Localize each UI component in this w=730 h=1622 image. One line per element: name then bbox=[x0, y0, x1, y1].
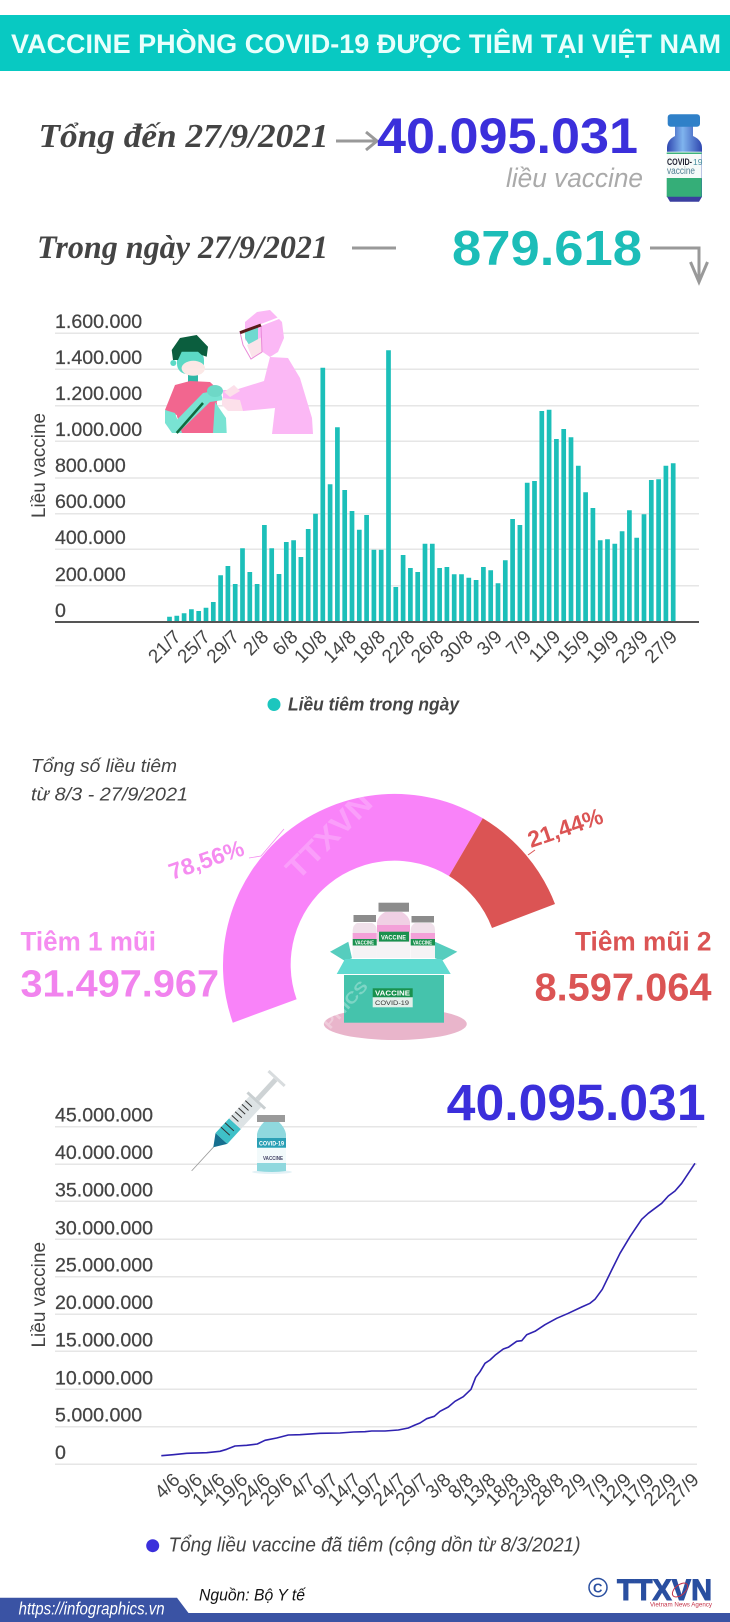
daily doses summary: Trong ngày 27/9/2021 bbox=[37, 230, 328, 266]
x axis labels: 7/9 bbox=[502, 627, 536, 660]
right vial: VACCINE bbox=[413, 940, 433, 946]
heading: total injected period bbox=[31, 755, 188, 804]
y axis labels: 1.600.000 bbox=[55, 311, 142, 333]
icon: health worker vaccinating a child bbox=[165, 310, 313, 434]
dash connector bbox=[352, 246, 396, 250]
title banner bbox=[0, 15, 730, 71]
x axis labels: 28/8 bbox=[527, 1470, 568, 1511]
icon: small vaccine vial: VACCINE bbox=[263, 1156, 283, 1162]
y axis labels: 30.000.000 bbox=[55, 1217, 153, 1239]
title banner: VACCINE PHÒNG COVID-19 ĐƯỢC TIÊM TẠI VIỆT NAM bbox=[11, 29, 721, 59]
x axis labels: 25/7 bbox=[174, 627, 215, 668]
icon: syringe bbox=[183, 1069, 286, 1179]
footer bar bbox=[0, 1598, 730, 1622]
y axis title: Liều vaccine bbox=[28, 1242, 50, 1348]
x axis labels: 14/8 bbox=[320, 627, 361, 668]
total doses summary bbox=[38, 108, 643, 193]
x axis labels: 18/8 bbox=[482, 1470, 523, 1511]
legend: daily doses: Liều tiêm trong ngày bbox=[288, 694, 460, 714]
y axis labels: 45.000.000 bbox=[55, 1105, 153, 1127]
first dose figures: 31.497.967 bbox=[20, 964, 219, 1006]
icon: vaccine vial: COVID- bbox=[667, 157, 692, 168]
x axis labels: 3/8 bbox=[422, 1470, 455, 1503]
x axis labels: 2/9 bbox=[557, 1470, 591, 1503]
x axis labels: 4/7 bbox=[286, 1470, 320, 1503]
x axis labels: 15/9 bbox=[553, 627, 594, 668]
cumulative line bbox=[161, 1163, 695, 1456]
gauge segment: first dose bbox=[223, 794, 483, 1023]
x axis labels: 9/6 bbox=[174, 1470, 207, 1503]
logo: TTXVN: Vietnam News Agency bbox=[650, 1602, 713, 1608]
icon: vaccine vial: vaccine bbox=[667, 166, 695, 177]
arrow: turning down bbox=[650, 248, 708, 282]
second dose figures bbox=[534, 926, 712, 1010]
center vial bbox=[377, 903, 410, 958]
health worker bbox=[222, 310, 313, 434]
y axis labels: 800.000 bbox=[55, 455, 126, 477]
second dose figures: Tiêm mũi 2 bbox=[575, 926, 712, 956]
y axis labels: 5.000.000 bbox=[55, 1405, 142, 1427]
y axis labels: 1.400.000 bbox=[55, 347, 142, 369]
total doses summary: liều vaccine bbox=[506, 163, 643, 193]
x axis labels: 29/6 bbox=[256, 1470, 297, 1511]
x axis labels: 27/9 bbox=[641, 627, 682, 668]
y axis labels: 25.000.000 bbox=[55, 1255, 153, 1277]
x axis labels: 26/8 bbox=[407, 627, 448, 668]
y axis labels: 600.000 bbox=[55, 491, 126, 513]
icon: vaccine vial: 19 bbox=[693, 157, 703, 167]
x axis labels: 24/7 bbox=[369, 1470, 410, 1511]
box label: VACCINE bbox=[375, 991, 410, 998]
daily doses summary bbox=[37, 222, 708, 282]
x axis labels: 4/6 bbox=[151, 1470, 185, 1503]
x axis labels: 14/6 bbox=[189, 1470, 230, 1511]
total doses summary: 40.095.031 bbox=[377, 108, 638, 164]
gauge chart: dose share bbox=[165, 786, 606, 1023]
x axis labels: 13/8 bbox=[460, 1470, 501, 1511]
x axis labels: 29/7 bbox=[203, 627, 244, 668]
y axis labels: 1.000.000 bbox=[55, 419, 142, 441]
x axis labels: 8/8 bbox=[444, 1470, 478, 1503]
y axis labels: 400.000 bbox=[55, 527, 126, 549]
logo: TTXVN: TTXVN bbox=[617, 1574, 712, 1607]
x axis labels: 22/8 bbox=[378, 627, 419, 668]
y axis labels bbox=[55, 1105, 153, 1464]
gauge segment: second dose bbox=[449, 818, 555, 928]
x axis labels: 29/7 bbox=[392, 1470, 433, 1511]
x axis labels: 12/9 bbox=[595, 1470, 636, 1511]
x axis labels bbox=[151, 1470, 704, 1511]
x axis labels: 23/9 bbox=[612, 627, 653, 668]
x axis labels: 27/9 bbox=[663, 1470, 704, 1511]
label: second dose percent: 21,44% bbox=[524, 803, 606, 853]
y axis labels: 0 bbox=[55, 600, 66, 622]
y axis labels: 1.200.000 bbox=[55, 383, 142, 405]
heading: total injected period: Tổng số liều tiêm bbox=[31, 755, 177, 776]
second dose figures: 8.597.064 bbox=[534, 967, 712, 1010]
right vial bbox=[411, 916, 435, 958]
y axis labels: 20.000.000 bbox=[55, 1292, 153, 1314]
x axis labels: 21/7 bbox=[145, 627, 186, 668]
center vial: VACCINE bbox=[381, 934, 407, 942]
label: first dose percent: 78,56% bbox=[165, 835, 247, 885]
y axis labels: 40.000.000 bbox=[55, 1142, 153, 1164]
footer bar: https://infographics.vn bbox=[19, 1598, 165, 1618]
icon: small vaccine vial bbox=[252, 1115, 292, 1174]
icon: vaccine vial bbox=[667, 114, 703, 202]
y axis labels: 10.000.000 bbox=[55, 1367, 153, 1389]
x axis labels: 7/9 bbox=[580, 1470, 613, 1503]
total doses summary: Tổng đến 27/9/2021 bbox=[38, 118, 328, 155]
y axis labels: 0 bbox=[55, 1442, 66, 1464]
x axis labels bbox=[145, 627, 682, 668]
x axis labels: 11/9 bbox=[525, 627, 565, 667]
watermark on box: PHICS bbox=[320, 978, 372, 1033]
left vial: VACCINE bbox=[355, 940, 375, 946]
x axis labels: 9/7 bbox=[309, 1470, 343, 1503]
box label bbox=[373, 988, 413, 1007]
source: Nguồn: Bộ Y tế bbox=[199, 1586, 306, 1605]
x axis labels: 22/9 bbox=[640, 1470, 681, 1511]
left vial bbox=[353, 915, 377, 958]
icon: vaccine box bbox=[320, 903, 467, 1040]
logo: TTXVN: C bbox=[593, 1580, 603, 1596]
watermark: TTXVN bbox=[280, 786, 379, 886]
bar chart: daily doses bbox=[28, 311, 699, 668]
y axis labels bbox=[55, 311, 142, 622]
x axis labels: 14/7 bbox=[324, 1470, 365, 1511]
line chart: cumulative doses bbox=[28, 1105, 704, 1511]
x axis labels: 24/6 bbox=[234, 1470, 275, 1511]
x axis labels: 2/8 bbox=[240, 627, 273, 660]
first dose figures: Tiêm 1 mũi bbox=[20, 926, 156, 956]
x axis labels: 19/6 bbox=[211, 1470, 252, 1511]
x axis labels: 17/9 bbox=[618, 1470, 659, 1511]
cumulative total figure: 40.095.031 bbox=[447, 1074, 706, 1131]
icon: small vaccine vial: COVID-19 bbox=[259, 1140, 284, 1148]
x axis labels: 30/8 bbox=[437, 627, 478, 668]
x axis labels: 6/8 bbox=[269, 627, 302, 660]
x axis labels: 19/7 bbox=[347, 1470, 388, 1511]
daily doses summary: 879.618 bbox=[452, 222, 642, 276]
y axis labels: 15.000.000 bbox=[55, 1329, 153, 1351]
x axis labels: 18/8 bbox=[349, 627, 390, 668]
y axis title: Liều vaccine bbox=[28, 413, 50, 518]
x axis labels: 3/9 bbox=[473, 627, 507, 660]
x axis labels: 19/9 bbox=[583, 627, 624, 668]
x axis labels: 23/8 bbox=[505, 1470, 546, 1511]
first dose figures bbox=[20, 926, 219, 1006]
x axis labels: 10/8 bbox=[291, 627, 332, 668]
legend: cumulative doses: Tổng liều vaccine đã tiêm (cộng dồn từ 8/3/2021) bbox=[168, 1535, 580, 1557]
box label: COVID-19 bbox=[375, 1000, 409, 1007]
bars bbox=[167, 350, 676, 622]
y axis labels: 200.000 bbox=[55, 564, 126, 586]
heading: total injected period: từ 8/3 - 27/9/2021 bbox=[31, 784, 188, 804]
label: first dose percent bbox=[165, 829, 284, 885]
y axis labels: 35.000.000 bbox=[55, 1179, 153, 1201]
child bbox=[165, 335, 227, 433]
arrow: to total bbox=[336, 132, 377, 150]
